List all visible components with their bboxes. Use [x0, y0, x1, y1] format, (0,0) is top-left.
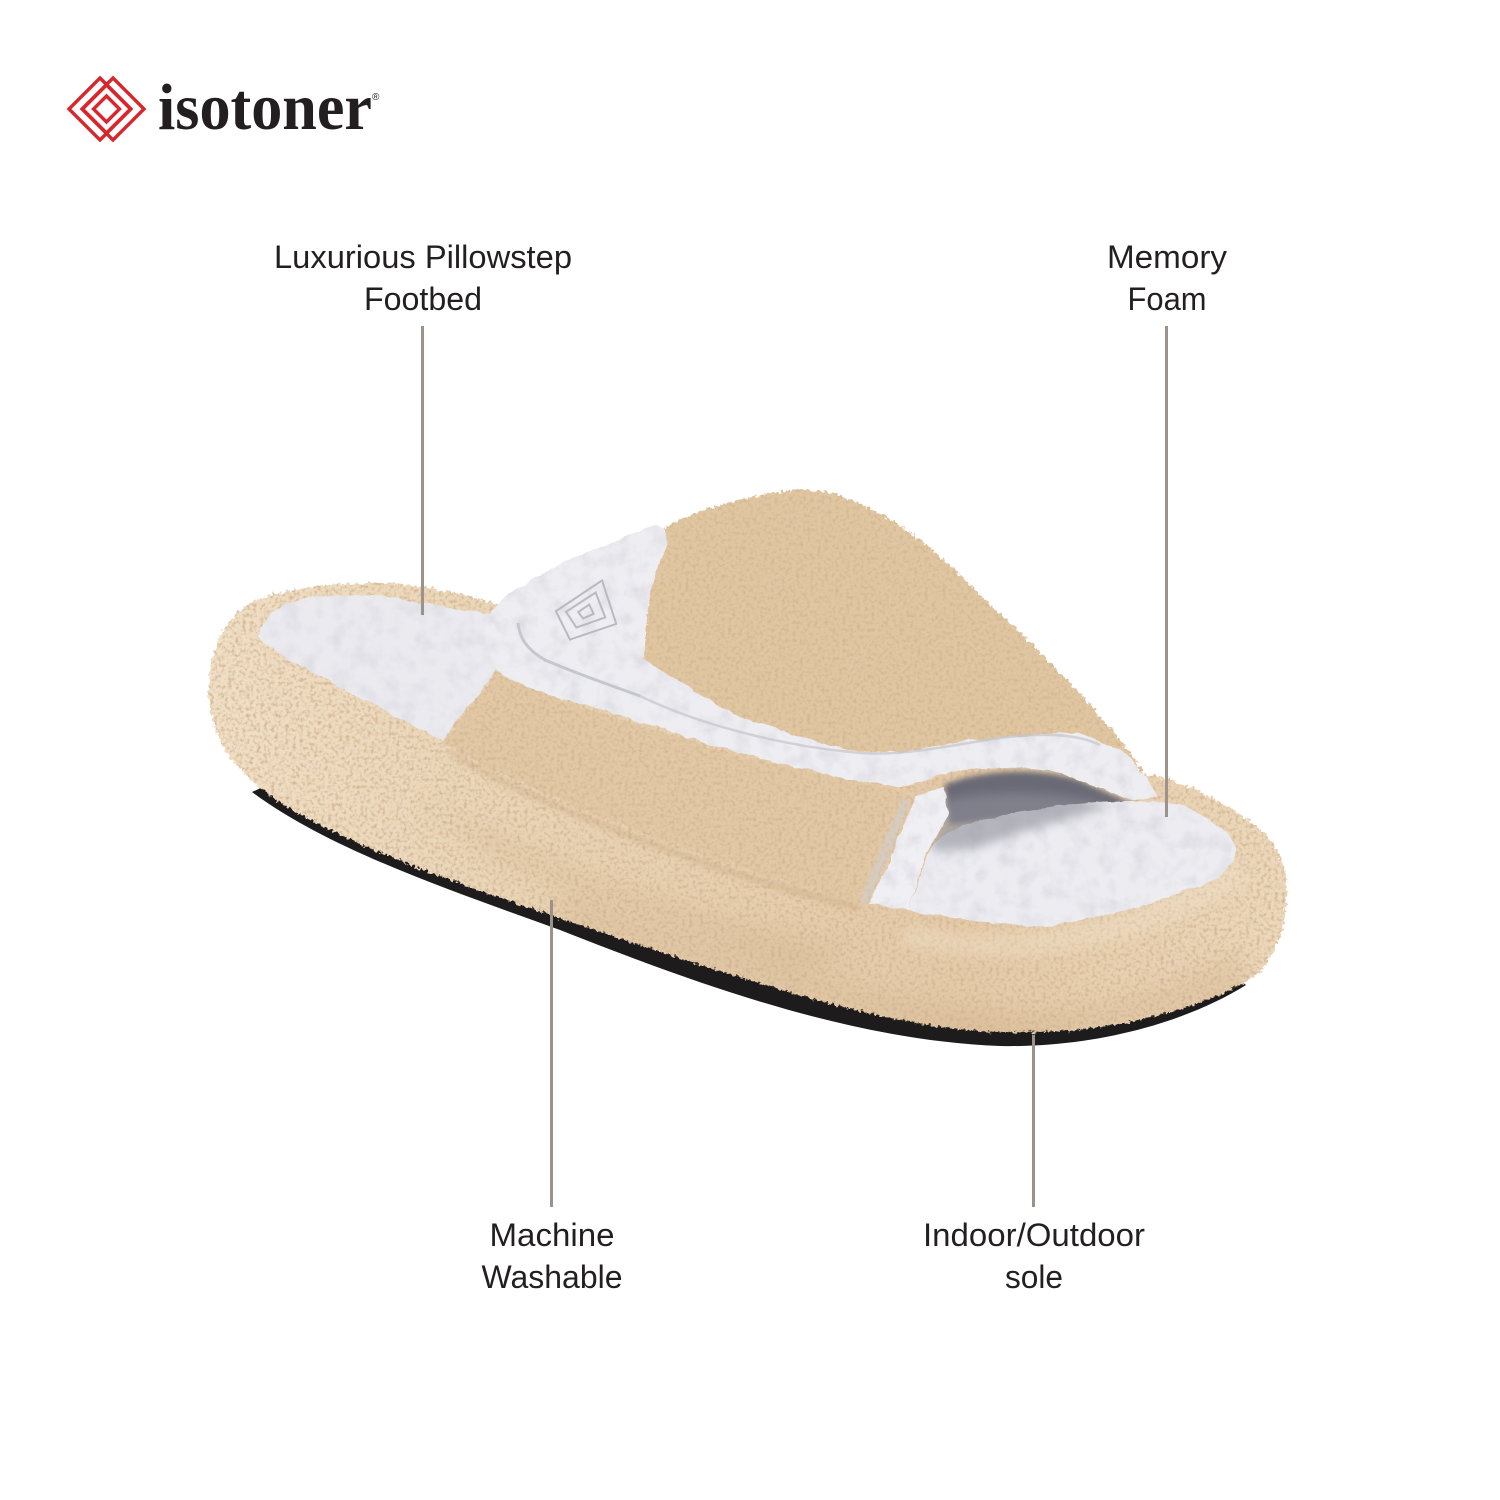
strap tab seam	[518, 623, 640, 696]
strap white tab	[485, 525, 1158, 800]
inner footbed shadows	[930, 793, 1110, 851]
strap binding seam	[640, 696, 1100, 754]
callout: Machine Washable	[482, 900, 622, 1295]
label line 2: Footbed	[364, 281, 482, 317]
callout: Luxurious Pillowstep Footbed	[274, 239, 572, 615]
side binding	[869, 787, 949, 910]
strap beige panel	[645, 490, 1146, 775]
icon: red nested diamonds	[69, 78, 144, 140]
platform rim	[209, 583, 1287, 1032]
rim shading	[478, 834, 1255, 1032]
icon: embroidered logo on tab	[553, 579, 617, 641]
label: Luxurious Pillowstep	[274, 239, 572, 275]
side panel ridge	[450, 752, 860, 908]
leader line	[550, 900, 553, 1207]
label: Memory	[1107, 239, 1227, 275]
logo: isotoner	[69, 71, 380, 144]
side binding shadow	[864, 800, 906, 902]
leader line	[421, 326, 424, 615]
registered mark: ®	[372, 92, 380, 103]
heel footbed	[257, 595, 496, 740]
label line 2: sole	[1005, 1259, 1063, 1295]
wordmark: isotoner	[158, 71, 372, 144]
label: Machine	[490, 1217, 614, 1253]
callout: Indoor/Outdoor sole	[923, 1035, 1145, 1295]
callout: Memory Foam	[1107, 239, 1227, 817]
label line 2: Foam	[1128, 281, 1206, 317]
leader line	[1165, 326, 1168, 817]
front footbed	[908, 802, 1236, 927]
leader line	[1032, 1035, 1035, 1207]
side upper panel	[443, 672, 915, 905]
outsole	[252, 770, 1246, 1046]
opening shadow	[944, 772, 1133, 825]
label: Indoor/Outdoor	[923, 1217, 1145, 1253]
slipper illustration	[209, 490, 1287, 1050]
label line 2: Washable	[482, 1259, 622, 1295]
